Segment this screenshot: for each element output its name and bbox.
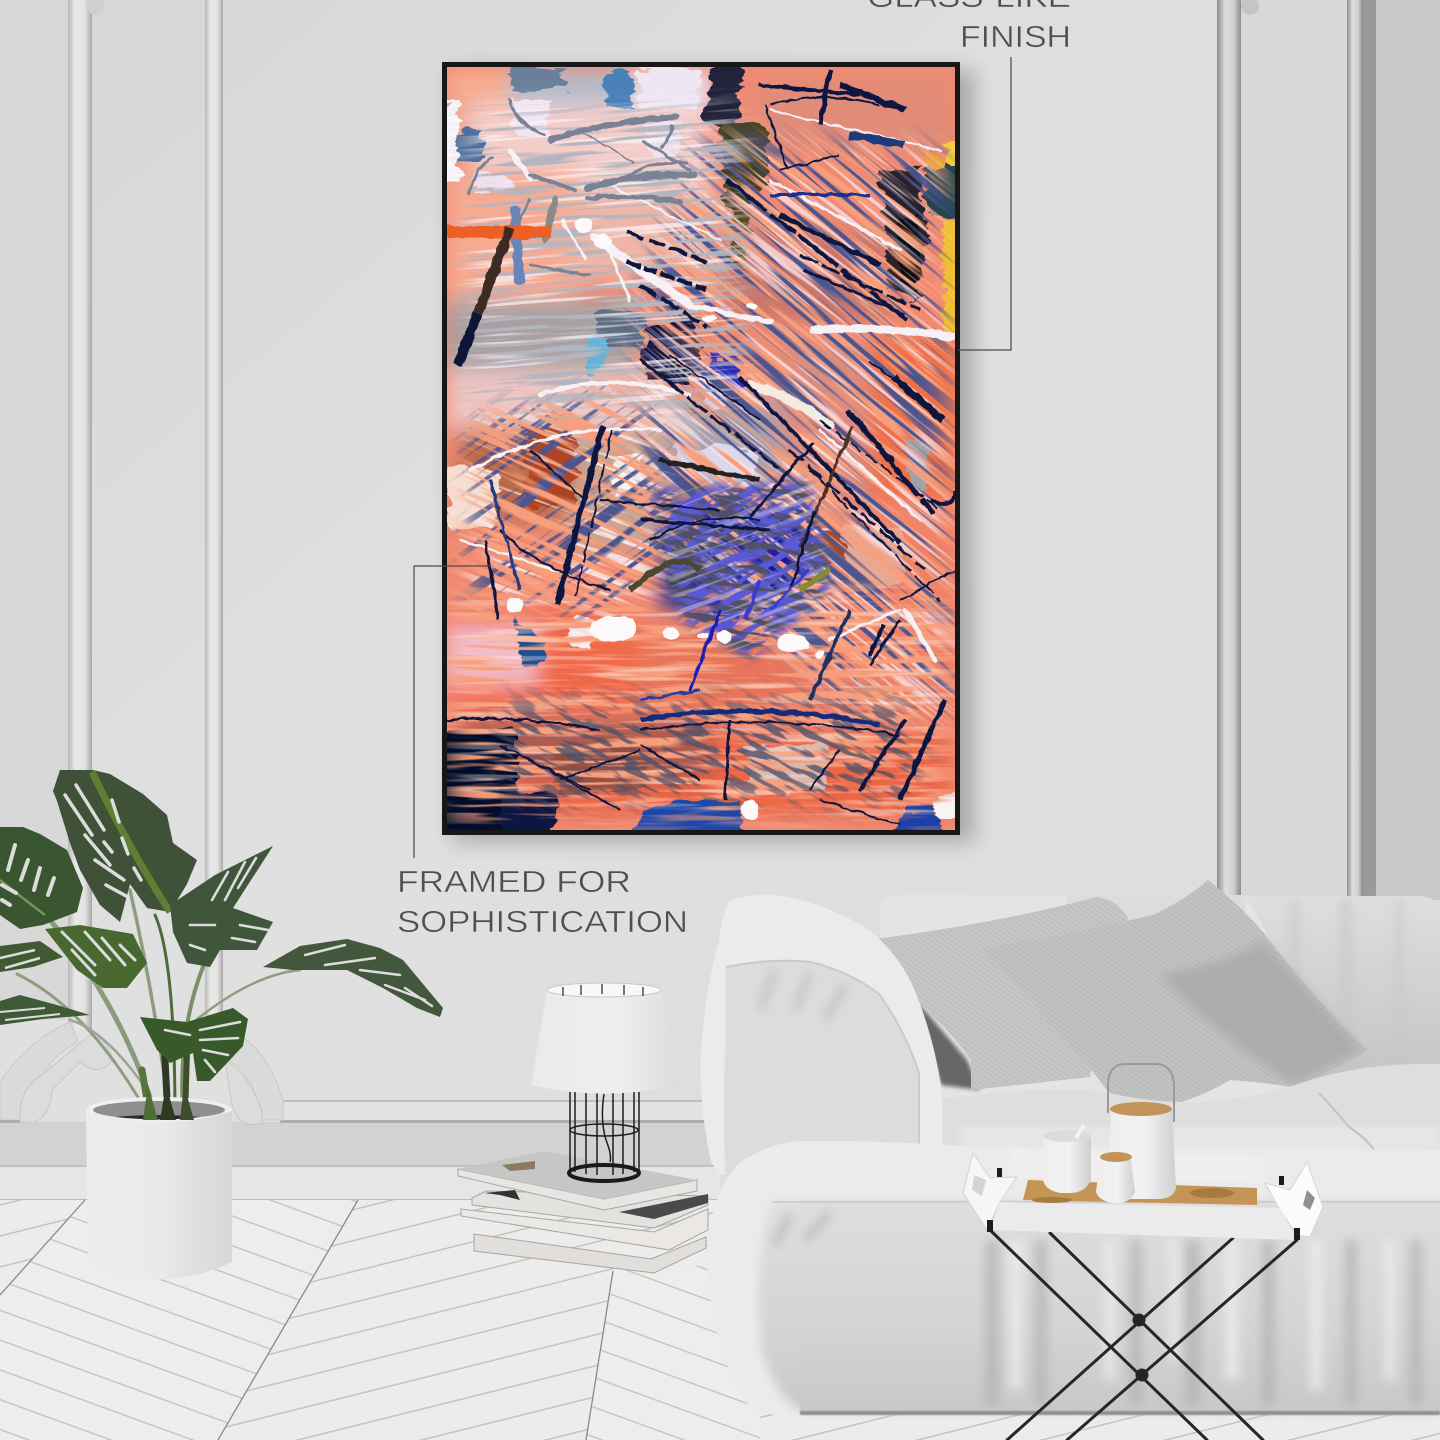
- dark flecks, lower band: [480, 679, 941, 821]
- blue knot: [644, 473, 836, 666]
- seat cushions: [935, 1064, 1440, 1160]
- red band and dark diagonal: [447, 226, 550, 238]
- plant stems: [17, 890, 300, 1118]
- white paint drops: [507, 217, 824, 820]
- herringbone floor: [0, 1200, 1440, 1440]
- leaf: top large: [53, 770, 197, 922]
- book four: [474, 1234, 706, 1273]
- table lamp: [531, 983, 679, 1181]
- white planter: [86, 1085, 232, 1280]
- grey pillow: [866, 897, 1128, 1090]
- light pillow: [982, 880, 1367, 1103]
- leaf: left: [0, 827, 83, 929]
- leaf: upper right: [170, 846, 273, 967]
- book one: [458, 1151, 697, 1210]
- painted canvas: [447, 67, 955, 830]
- sofa back cushions: [880, 895, 1440, 1110]
- leaf: low left: [0, 995, 90, 1025]
- book two: [472, 1190, 708, 1228]
- callout leader: framed for sophistication: [414, 566, 490, 858]
- mug: [1043, 1125, 1091, 1193]
- pitcher: [1108, 1064, 1176, 1199]
- white tray: [963, 1150, 1323, 1240]
- white dry brush sweeps: [460, 110, 953, 660]
- horizontal brush streaks, lower: [447, 580, 955, 830]
- table legs: [990, 1230, 1297, 1440]
- grey-blue strokes: [469, 100, 694, 280]
- callout leader: glass-like finish: [958, 57, 1011, 350]
- callout: framed for: FRAMED FOR: [397, 864, 631, 899]
- dark navy strokes: [447, 70, 955, 825]
- callout: finish: FINISH: [960, 19, 1071, 54]
- wall art shadow: [452, 70, 974, 842]
- leaf: mid left: [45, 925, 147, 988]
- leaf: long right: [263, 939, 443, 1017]
- book stack: [458, 1151, 708, 1273]
- black frame: [442, 62, 960, 835]
- leaf: far left: [0, 941, 63, 972]
- book three: [461, 1209, 708, 1250]
- diagonal brush streaks, right side: [618, 118, 955, 742]
- mixed brush streaks, left of centre: [448, 368, 693, 636]
- sofa front: [708, 1141, 1440, 1416]
- gestural strokes: [447, 70, 955, 825]
- leaf: low center: [140, 1008, 248, 1081]
- potted plant: [0, 770, 443, 1280]
- framed abstract painting: [442, 62, 960, 835]
- tray table: [963, 1064, 1323, 1440]
- small canister: [1096, 1152, 1135, 1203]
- rough paint patches: [430, 60, 965, 845]
- sofa back arm: [700, 895, 942, 1191]
- callout: sophistication: SOPHISTICATION: [397, 904, 688, 939]
- grey brush streaks, upper left: [453, 89, 761, 431]
- sofa: [700, 880, 1440, 1416]
